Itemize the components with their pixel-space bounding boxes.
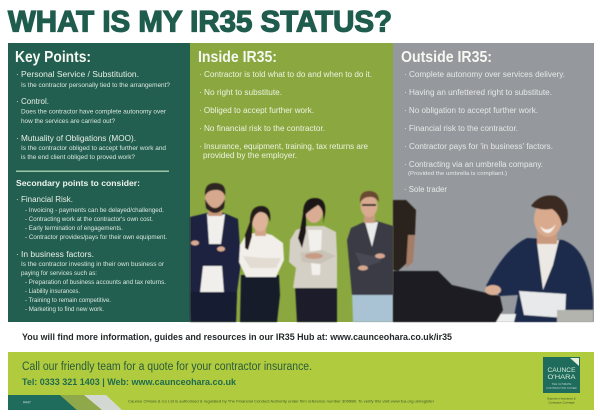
contact details: Tel: 0333 321 1403 | Web: www.caunceohara.co.uk (22, 377, 237, 387)
hub link line: You will find more information, guides and resources in our IR35 Hub at: www.caunceohara.co.uk/ir35 (22, 332, 453, 343)
footer chevrons: #447 (23, 400, 31, 404)
logo: Caunce O'Hara: CAUNCE (548, 368, 576, 374)
logo: Caunce O'Hara (543, 357, 580, 404)
key point: personal service: Is the contractor personally tied to the arrangement? (21, 82, 171, 89)
secondary point: in business factors: - Marketing to find new work. (25, 306, 104, 313)
panel: inside IR35 (190, 43, 393, 322)
key point: control: how the services are carried out? (21, 118, 116, 125)
secondary point: in business factors: - Liability insurances. (25, 288, 80, 295)
panel: contact footer (8, 352, 594, 410)
key point: control: Control. (21, 97, 49, 106)
list: inside IR35 criteria: · No financial risk to the contractor. (199, 124, 325, 133)
secondary point: in business factors: Is the contractor investing in their own business or (21, 261, 164, 268)
list: outside IR35 criteria: · Financial risk to the contractor. (404, 124, 518, 133)
key point: personal service: · (16, 70, 19, 79)
list: outside IR35 criteria: · Contractor pays for 'in business' factors. (404, 142, 553, 151)
heading: secondary points: Secondary points to consider: (16, 178, 140, 188)
logo: Caunce O'Hara: Contractor Coverage (549, 400, 575, 404)
secondary point: financial risk: - Contracting work at the contractor's own cost. (25, 216, 153, 223)
secondary point: financial risk: - Invoicing - payments can be delayed/challenged. (25, 207, 164, 214)
key point: mutuality of obligations (16, 134, 167, 161)
logo: Caunce O'Hara: O'HARA (548, 375, 576, 381)
secondary point: in business factors: - Training to remain competitive. (25, 297, 111, 304)
key point: mutuality of obligations: Is the contractor obliged to accept further work and (21, 145, 167, 152)
secondary point: in business factors: In business factors. (21, 250, 94, 259)
key point: mutuality of obligations: · (16, 134, 19, 143)
logo: Caunce O'Hara: THE ULTIMATE (552, 382, 572, 386)
key point: control: · (16, 97, 19, 106)
heading: inside IR35: Inside IR35: (198, 49, 277, 66)
person: woman in white blouse (239, 206, 284, 322)
secondary point: financial risk (16, 195, 167, 241)
secondary point: financial risk: Financial Risk. (21, 195, 73, 204)
secondary point: financial risk: · (16, 195, 19, 204)
list: outside IR35 criteria: · No obligation to accept further work. (404, 106, 538, 115)
legal text: Caunce O'Hara & Co Ltd is authorised & regulated by The Financial Conduct Authority under firm reference number 309988. To verify this visit www.fca.org.uk/register (128, 400, 435, 404)
logo: Caunce O'Hara: Experts in Insurance & (547, 396, 576, 400)
footer chevrons (8, 395, 122, 410)
list: outside IR35 criteria: · Having an unfettered right to substitute. (404, 88, 552, 97)
secondary point: financial risk: - Contractor provides/pays for their own equipment. (25, 234, 167, 241)
list: inside IR35 criteria: · Insurance, equipment, training, tax returns are (199, 142, 369, 151)
call to action: Call our friendly team for a quote for your contractor insurance. (22, 361, 312, 373)
secondary point: in business factors: - Preparation of business accounts and tax returns. (25, 279, 166, 286)
person: man in grey blazer and jeans (347, 191, 393, 322)
list: inside IR35 criteria: · Contractor is told what to do and when to do it. (199, 70, 372, 79)
person: smiling man in navy suit (486, 195, 593, 322)
logo: Caunce O'Hara: CONTRACTOR COVER (546, 386, 577, 390)
heading: key points: Key Points: (15, 49, 91, 66)
key point: control (16, 97, 166, 125)
title: WHAT IS MY IR35 STATUS? (8, 6, 392, 38)
key point: personal service: Personal Service / Substitution. (21, 70, 139, 79)
photo: two men shaking hands (393, 195, 593, 322)
list: outside IR35 criteria: (Provided the umbrella is compliant.) (408, 171, 507, 177)
person: man from behind in dark suit (393, 200, 503, 322)
list: inside IR35 criteria: · No right to substitute. (199, 88, 282, 97)
photo: four contractors with folded arms (190, 183, 393, 322)
key point: mutuality of obligations: is the end client obliged to proved work? (21, 154, 136, 161)
list: outside IR35 criteria: · Complete autonomy over services delivery. (404, 70, 565, 79)
panel: outside IR35 (393, 43, 594, 322)
person: woman in beige blazer (289, 198, 337, 322)
list: outside IR35 criteria (404, 70, 565, 194)
list: outside IR35 criteria: · Contracting via an umbrella company. (404, 160, 543, 169)
list: inside IR35 criteria (199, 70, 372, 160)
list: outside IR35 criteria: · Sole trader (404, 185, 447, 194)
panel: key points (8, 43, 190, 322)
secondary point: in business factors (16, 250, 166, 313)
secondary point: in business factors: paying for services such as: (21, 270, 97, 277)
list: inside IR35 criteria: provided by the employer. (203, 151, 297, 160)
key point: personal service (16, 70, 171, 89)
list: inside IR35 criteria: · Obliged to accept further work. (199, 106, 314, 115)
heading: outside IR35: Outside IR35: (401, 49, 492, 66)
key point: control: Does the contractor have complete autonomy over (21, 108, 166, 116)
person: bearded man in navy suit (190, 183, 241, 322)
key point: mutuality of obligations: Mutuality of Obligations (MOO). (21, 134, 136, 143)
secondary point: financial risk: - Early termination of engagements. (25, 225, 123, 232)
secondary point: in business factors: · (16, 250, 19, 259)
